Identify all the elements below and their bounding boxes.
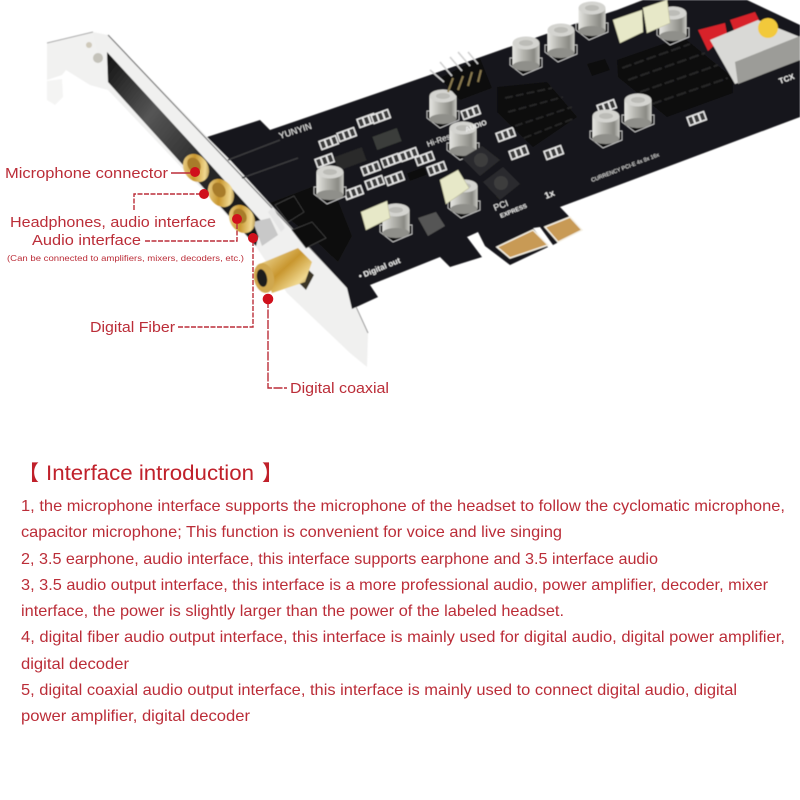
board silkscreen text: 1x: [543, 188, 556, 201]
heat sinks: [497, 37, 733, 147]
board silkscreen text: • Digital out: [357, 256, 402, 281]
heading: 【: [18, 462, 39, 485]
inductors: [418, 146, 520, 236]
photo: PCI-E sound card: [47, 0, 800, 367]
body text: interface list: [21, 498, 785, 725]
board silkscreen text: YUNYIN: [278, 121, 313, 141]
board silkscreen text: TCX: [778, 72, 796, 86]
label: digital fiber: Digital Fiber: [90, 319, 175, 336]
film capacitors: [361, 0, 670, 230]
crystal module: [710, 18, 800, 84]
circuit board: [207, 0, 800, 309]
label: audio interface note: (Can be connected to amplifiers, mixers, decoders, etc.): [7, 253, 244, 263]
board silkscreen text: Hi-Res: [426, 132, 452, 149]
gold fingers: [497, 217, 582, 258]
board silkscreen text: AUDIO: [464, 119, 488, 134]
label: headphones: Headphones, audio interface: [10, 214, 216, 231]
body text: interface list: power amplifier, digital decoder: [21, 708, 251, 725]
body text: interface list: 5, digital coaxial audio output interface, this interface is mainly used to connect digital audio, digital: [21, 682, 737, 699]
callout lines: [134, 173, 287, 388]
body text: interface list: 3, 3.5 audio output interface, this interface is a more professional audio, power amplifier, decoder, mixer: [21, 577, 769, 594]
label: audio interface: Audio interface: [32, 232, 141, 249]
body text: interface list: 1, the microphone interface supports the microphone of the headset to follow the cyclomatic microphone,: [21, 498, 785, 515]
board silkscreen text: CURRENCY PCI-E 4x 8x 16x: [591, 152, 660, 184]
body text: interface list: 4, digital fiber audio output interface, this interface is mainly used for digital audio, digital power amplifier,: [21, 629, 785, 646]
body text: interface list: capacitor microphone; This function is convenient for voice and live singing: [21, 524, 562, 541]
body text: interface list: digital decoder: [21, 656, 130, 673]
metal mounting bracket: [47, 32, 368, 367]
body text: interface list: 2, 3.5 earphone, audio interface, this interface supports earphone and 3.5 interface audio: [21, 551, 658, 568]
callout dots: [190, 167, 273, 304]
gold audio jacks: [178, 149, 260, 238]
board silkscreen text: PCI: [492, 198, 510, 213]
red terminals: [698, 12, 760, 51]
capacitors: [314, 2, 689, 242]
pin header: [430, 52, 492, 100]
coaxial connector: [251, 248, 312, 295]
heading: 】: [262, 462, 283, 485]
heading: Interface introduction: [46, 462, 254, 485]
silkscreen component clusters: [314, 99, 707, 201]
body text: interface list: interface, the power is slightly larger than the power of the labeled headset.: [21, 603, 564, 620]
board silkscreen text: EXPRESS: [500, 204, 528, 220]
label: digital coaxial: Digital coaxial: [290, 380, 389, 397]
label: microphone connector: Microphone connector: [5, 165, 168, 182]
small chip: [587, 59, 610, 76]
board silkscreen text: [278, 72, 796, 281]
